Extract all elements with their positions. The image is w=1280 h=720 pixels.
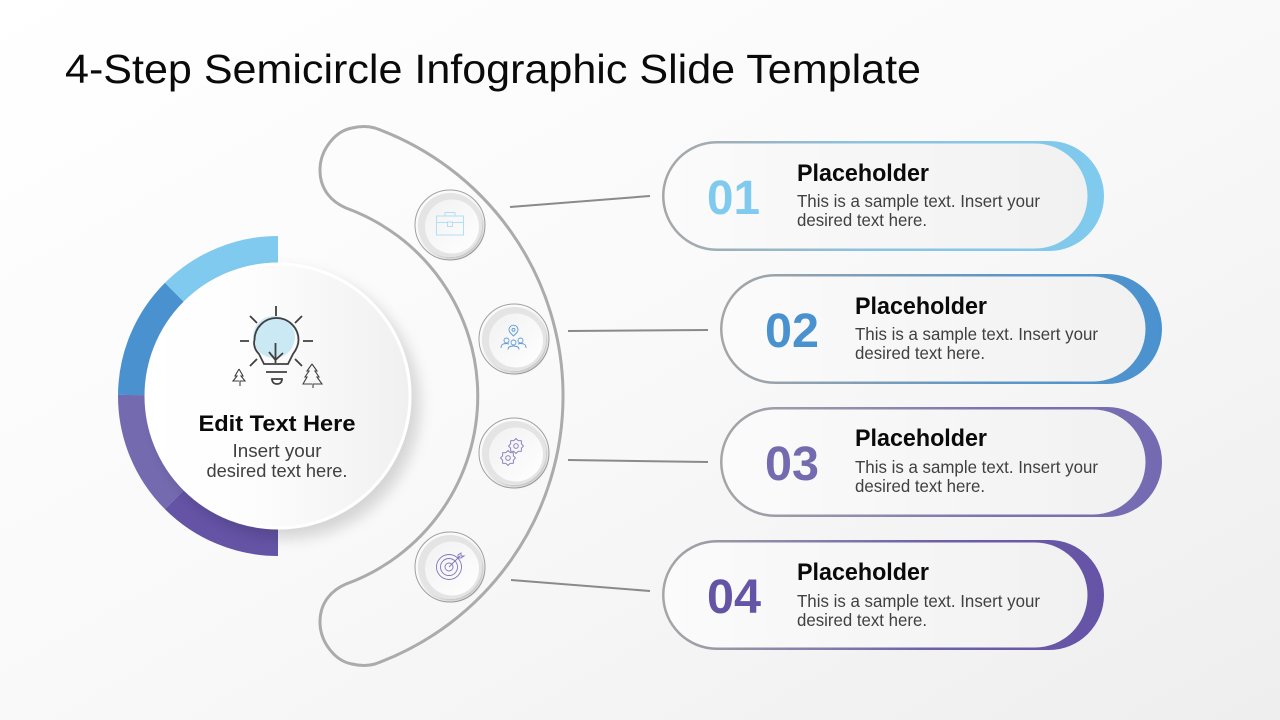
step 02 text: This is a sample text. Insert your	[855, 324, 1098, 344]
step 01 text	[797, 160, 1040, 230]
icon: gears	[500, 438, 524, 466]
title: 4-Step Semicircle Infographic Slide Template	[65, 46, 921, 92]
central text: Insert your	[232, 441, 322, 461]
step 01 pill	[662, 141, 1104, 251]
connector lines	[510, 196, 708, 591]
step 01 number: 01	[707, 172, 760, 225]
central text	[198, 411, 356, 481]
step 03 text: Placeholder	[855, 425, 987, 452]
icon: light bulb with trees	[233, 306, 322, 388]
segmented half ring	[132, 250, 278, 542]
step 04 text: Placeholder	[797, 559, 929, 586]
central text: desired text here.	[206, 461, 348, 481]
central disc	[146, 264, 410, 528]
icon: target	[436, 553, 464, 580]
step 04 text: desired text here.	[797, 610, 927, 630]
step 04 number: 04	[707, 571, 761, 624]
step 03 text: desired text here.	[855, 476, 985, 496]
step 02 text: desired text here.	[855, 343, 985, 363]
step 03 text: This is a sample text. Insert your	[855, 457, 1098, 477]
button 4: target	[415, 532, 485, 602]
button 3: gears	[479, 418, 549, 488]
step 03 number: 03	[765, 438, 819, 491]
step 02 pill	[720, 274, 1162, 384]
step 01 text: desired text here.	[797, 210, 927, 230]
button 2: team	[479, 304, 549, 374]
button 1: briefcase	[415, 190, 485, 260]
step 03 pill	[720, 407, 1162, 517]
icon: briefcase	[436, 212, 464, 235]
step 01 text: Placeholder	[797, 160, 929, 187]
icon: team with pin	[501, 325, 526, 350]
central text: Edit Text Here	[198, 411, 356, 436]
step 02 text	[855, 293, 1098, 363]
step 04 text: This is a sample text. Insert your	[797, 591, 1040, 611]
step 04 text	[797, 559, 1040, 630]
semicircle band outline	[320, 126, 563, 666]
step 04 pill	[662, 540, 1104, 650]
step 02 number: 02	[765, 305, 819, 358]
step 01 text: This is a sample text. Insert your	[797, 191, 1040, 211]
step 02 text: Placeholder	[855, 293, 987, 320]
step 03 text	[855, 425, 1098, 496]
